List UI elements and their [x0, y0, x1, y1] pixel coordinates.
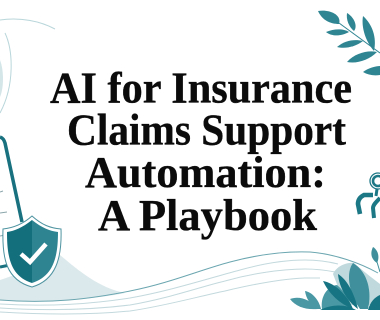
decorative arc and circle at top left [0, 19, 55, 113]
title: Automation: [85, 148, 326, 197]
title [50, 64, 352, 240]
icon: leaf branch top right [318, 11, 380, 75]
icon: shield with check mark [3, 216, 61, 287]
icon: foliage bottom right [290, 247, 380, 310]
icon: robot arm right [358, 173, 380, 218]
title: Claims Support [67, 106, 346, 154]
bottom wave background [0, 252, 378, 314]
title: A Playbook [98, 191, 318, 240]
icon: document clipboard [0, 137, 22, 267]
title: AI for Insurance [50, 64, 352, 112]
